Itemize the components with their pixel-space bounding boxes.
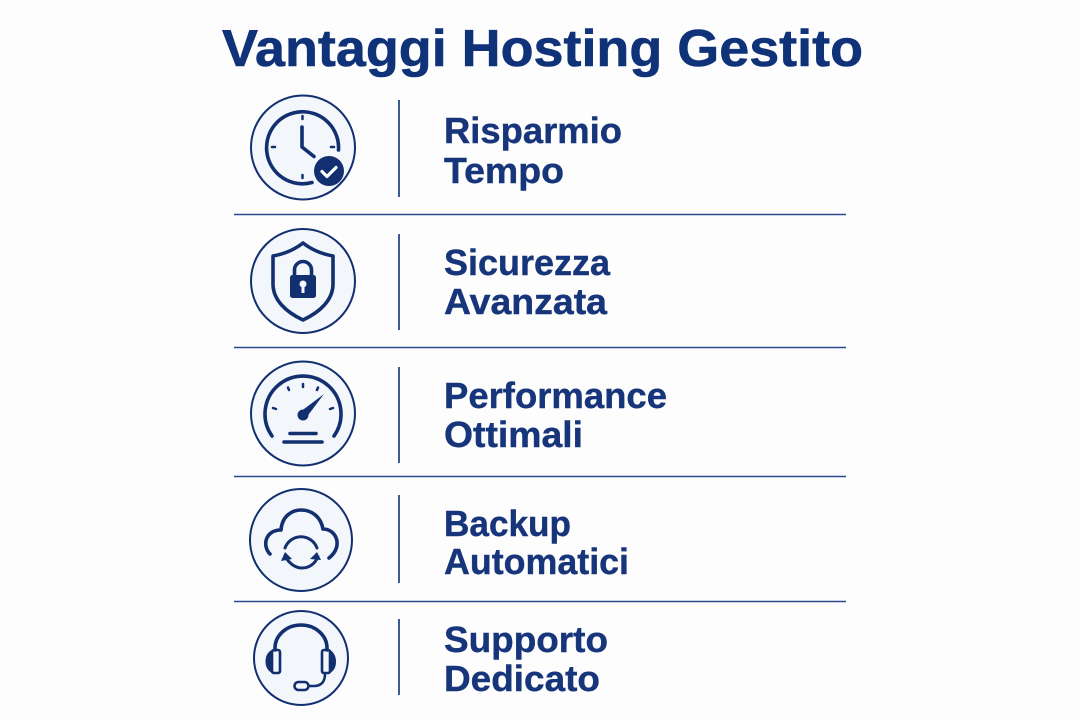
label: Risparmio Tempo: Risparmio: [444, 110, 622, 151]
label: Sicurezza Avanzata: [444, 242, 611, 322]
label: Performance Ottimali: Ottimali: [444, 414, 583, 455]
label: Backup Automatici: [444, 503, 629, 582]
label: Backup Automatici: Backup: [444, 503, 571, 544]
label: Risparmio Tempo: [444, 110, 622, 191]
label: Supporto Dedicato: Dedicato: [444, 658, 600, 699]
icon: speedometer gauge: [251, 362, 355, 466]
label: Supporto Dedicato: [444, 619, 608, 699]
label: Risparmio Tempo: Tempo: [444, 150, 564, 191]
row: Sicurezza Avanzata: [251, 229, 611, 333]
row: Supporto Dedicato: [254, 611, 608, 705]
row: Backup Automatici: [250, 489, 629, 591]
label: Supporto Dedicato: Supporto: [444, 619, 608, 660]
icon: cloud with sync arrows: [250, 489, 352, 591]
icon: shield with padlock: [251, 229, 355, 333]
label: Performance Ottimali: [444, 375, 667, 455]
label: Backup Automatici: Automatici: [444, 541, 629, 582]
title: Vantaggi Hosting Gestito: [222, 20, 863, 78]
icon: headset with microphone: [254, 611, 348, 705]
row: Performance Ottimali: [251, 362, 667, 466]
label: Sicurezza Avanzata: Sicurezza: [444, 242, 611, 283]
row: Risparmio Tempo: [251, 96, 622, 200]
label: Performance Ottimali: Performance: [444, 375, 667, 416]
icon: clock with check badge: [251, 96, 355, 200]
label: Sicurezza Avanzata: Avanzata: [444, 281, 608, 322]
